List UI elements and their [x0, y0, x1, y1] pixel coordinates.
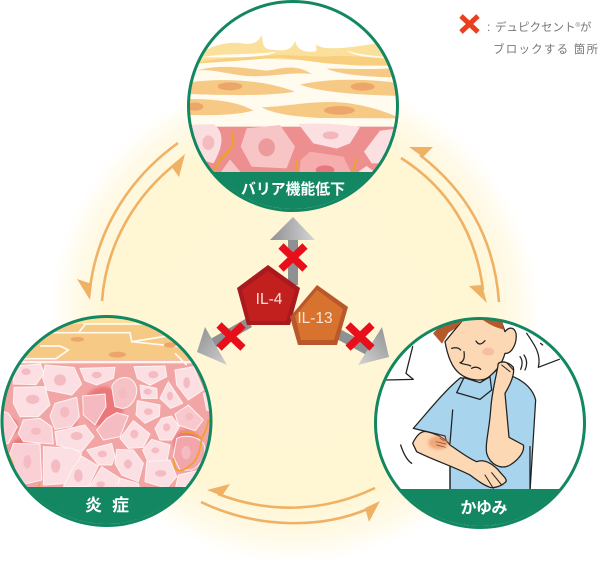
arrow: barrier to itch — [401, 158, 487, 303]
green label band — [214, 172, 372, 209]
arrow: itch to inflammation — [207, 484, 375, 508]
label: itch: かゆみ — [460, 499, 508, 517]
arrow: barrier to inflammation — [77, 143, 178, 300]
label: inflammation: 炎 症 — [85, 496, 129, 515]
skin layers illustration — [190, 35, 396, 172]
arrow: inflammation to itch — [201, 501, 380, 523]
arrow: left pair — [77, 143, 185, 301]
green label band — [400, 489, 560, 526]
arrow: down-left to inflammation — [197, 318, 252, 365]
label: IL-4: IL-4 — [256, 291, 283, 308]
legend text line 2: ブロックする 箇所 — [493, 42, 598, 56]
label: barrier dysfunction: バリア機能低下 — [241, 180, 345, 198]
arrow: up to barrier — [270, 217, 315, 285]
inflamed skin cells illustration — [0, 315, 220, 490]
green label band — [27, 487, 186, 524]
panel: inflammation — [0, 315, 220, 526]
face features — [482, 348, 494, 356]
arrow: itch to barrier — [409, 147, 499, 302]
icon: red X — [461, 16, 478, 32]
speech marks — [387, 347, 413, 380]
pentagon: IL-4 — [237, 265, 300, 325]
legend — [461, 16, 598, 56]
arrow: down-right to itch — [333, 327, 389, 365]
legend text line 1: ® — [576, 22, 580, 29]
arrow: right pair — [401, 147, 499, 303]
arrow: inflammation to barrier — [102, 154, 185, 301]
forearm and hand — [486, 362, 524, 467]
circle outline — [2, 316, 211, 526]
hair — [433, 318, 504, 343]
head — [445, 318, 516, 380]
pentagon: IL-13 — [290, 285, 348, 345]
arrow: bottom pair — [201, 484, 380, 523]
X mark: left — [219, 325, 243, 348]
label: IL-13: IL-13 — [297, 310, 333, 327]
legend text line 1: が — [580, 20, 592, 34]
collar — [457, 377, 492, 399]
illustration: man scratching — [387, 318, 559, 492]
circle outline — [188, 2, 398, 210]
legend text line 1: デュピクセント — [495, 22, 576, 34]
background glow — [50, 73, 540, 563]
panel: barrier dysfunction — [187, 0, 399, 212]
arm with rash — [413, 432, 506, 488]
legend colon: : — [487, 20, 490, 34]
X mark: right — [348, 325, 372, 348]
X mark: top — [281, 246, 305, 269]
circle outline — [376, 318, 584, 528]
panel: itch — [375, 318, 585, 528]
shirt — [413, 370, 536, 492]
